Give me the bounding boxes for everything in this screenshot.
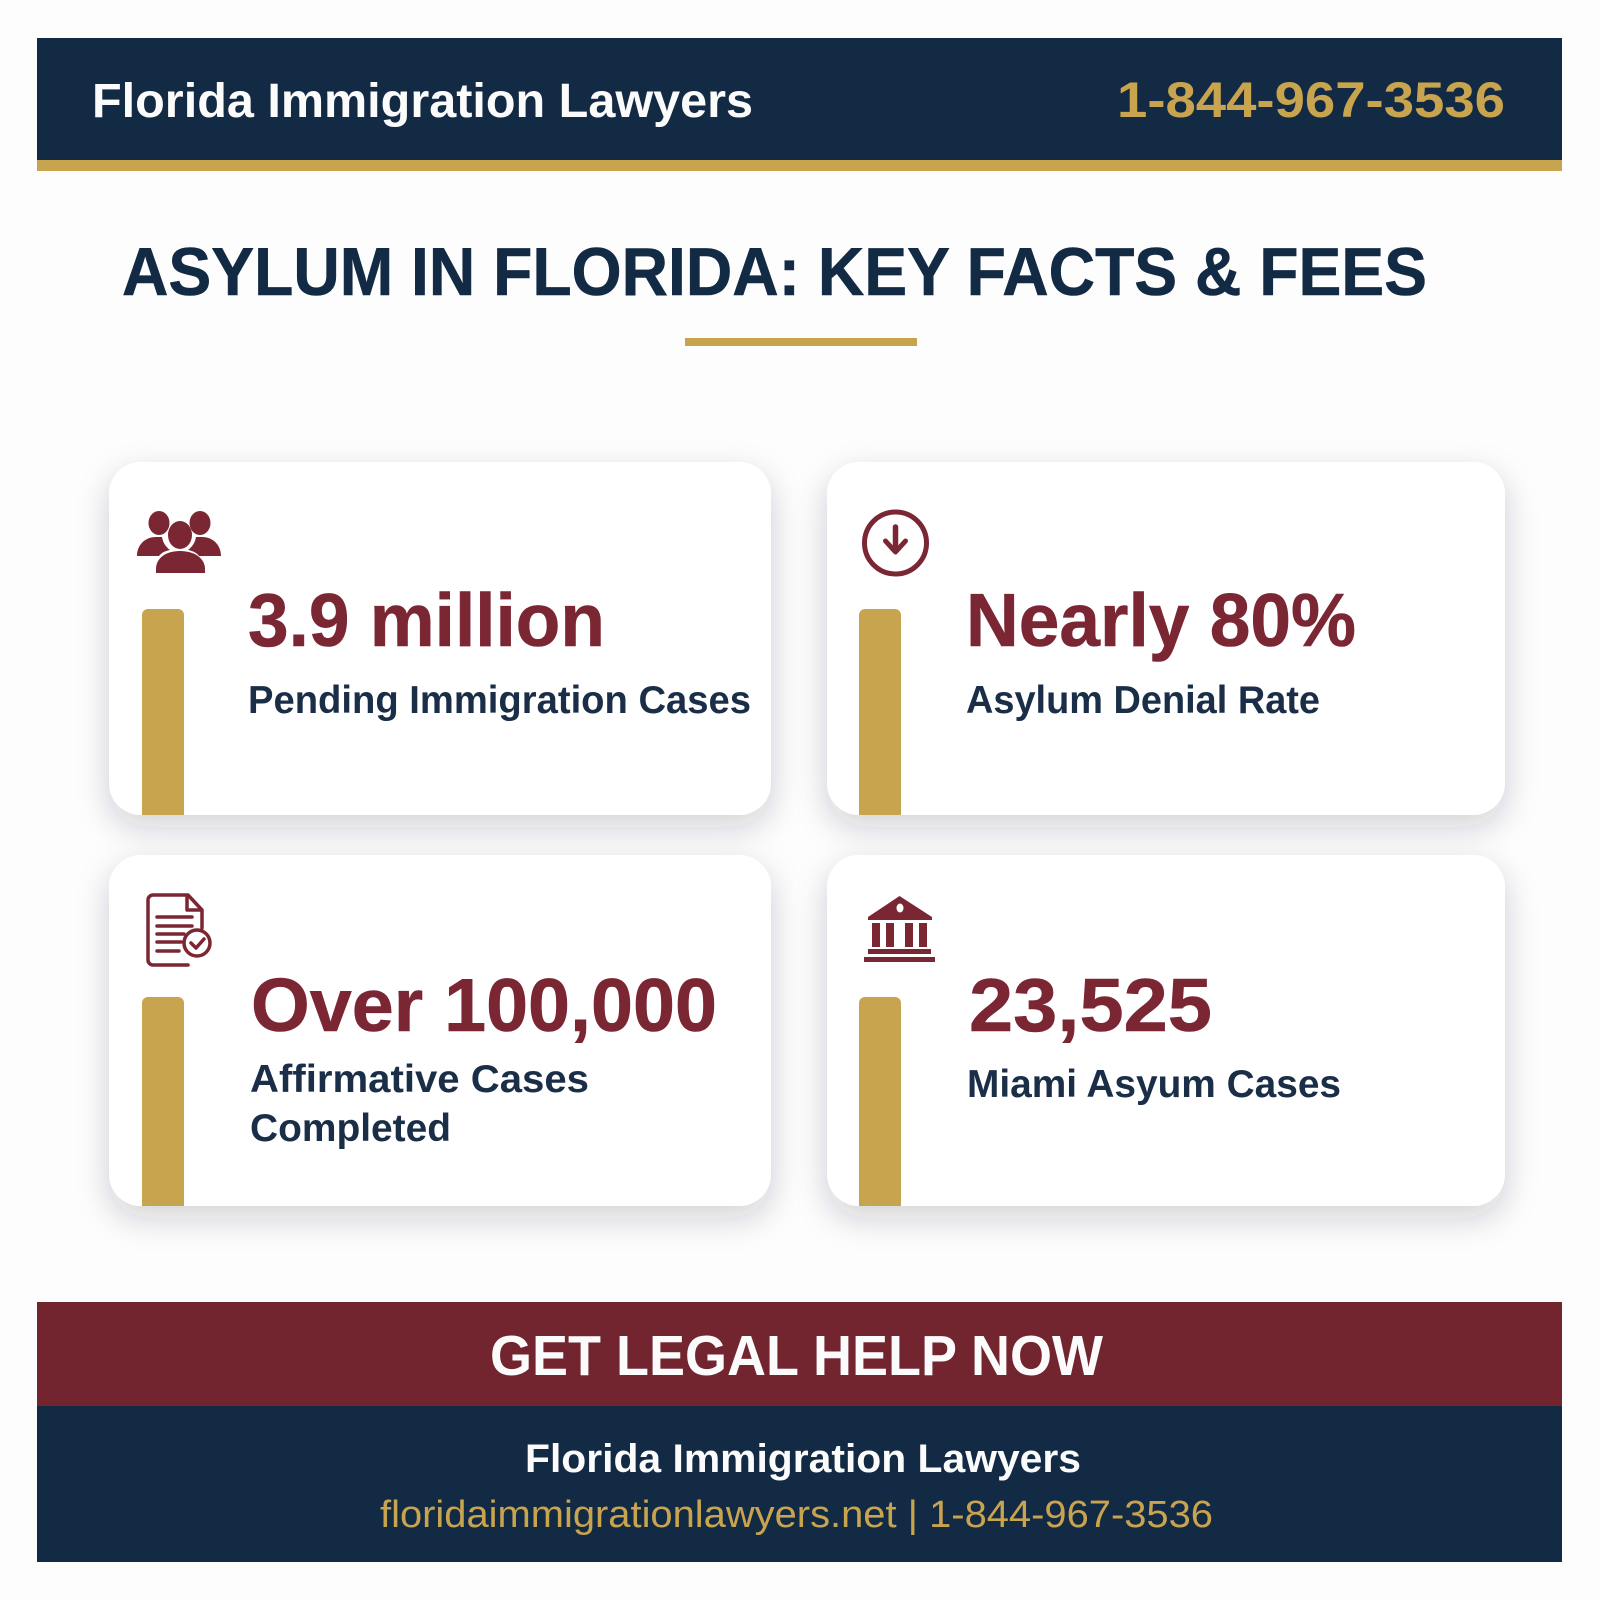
- title: ASYLUM IN FLORIDA: KEY FACTS & FEES: [122, 234, 1427, 310]
- stat value: 23,525: [969, 963, 1212, 1047]
- panel: miami asylum cases: [827, 855, 1505, 1206]
- title underline: [685, 338, 917, 346]
- stat label: Completed: [250, 1107, 451, 1150]
- stat label: Pending Immigration Cases: [248, 679, 751, 722]
- stat value: Nearly 80%: [966, 578, 1356, 662]
- stat value: Over 100,000: [251, 963, 717, 1047]
- footer: [37, 1406, 1562, 1562]
- stat label: Asylum Denial Rate: [966, 679, 1320, 722]
- footer firm name: Florida Immigration Lawyers: [525, 1437, 1081, 1481]
- call to action text: GET LEGAL HELP NOW: [490, 1324, 1103, 1388]
- call to action banner: [37, 1302, 1562, 1406]
- panel: asylum denial rate: [827, 462, 1505, 815]
- header bar: [37, 38, 1562, 171]
- icon: down arrow in circle: [864, 512, 926, 574]
- icon: courthouse: [864, 896, 935, 962]
- gold bar: [859, 997, 901, 1206]
- icon: document with check: [148, 895, 210, 965]
- stat label: Miami Asyum Cases: [967, 1063, 1341, 1106]
- gold bar: [859, 609, 901, 815]
- stat label: [250, 1058, 589, 1150]
- stat value: 3.9 million: [248, 578, 605, 662]
- gold bar: [142, 609, 184, 815]
- gold bar: [142, 997, 184, 1206]
- footer contact line: floridaimmigrationlawyers.net | 1-844-967-3536: [380, 1494, 1213, 1536]
- firm name: Florida Immigration Lawyers: [92, 75, 753, 128]
- phone number: 1-844-967-3536: [1117, 72, 1505, 128]
- panel: pending immigration cases: [109, 462, 771, 815]
- panel: affirmative cases completed: [109, 855, 771, 1206]
- stat label: Affirmative Cases: [250, 1058, 589, 1101]
- icon: people: [137, 511, 221, 573]
